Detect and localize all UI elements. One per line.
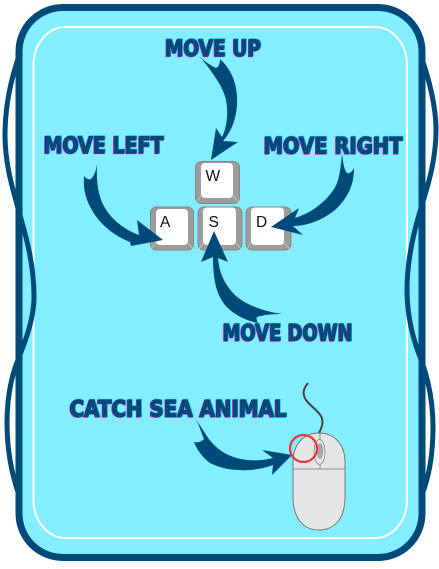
label: move left: MOVE LEFT [44, 133, 164, 158]
key: A [150, 207, 194, 250]
key: A: A [160, 214, 171, 231]
label: move left: MOVE LEFT [44, 134, 164, 159]
key: W [196, 162, 240, 204]
key: D: D [256, 214, 267, 231]
label: catch sea animal: CATCH SEA ANIMAL [70, 397, 287, 422]
arrow: move right to D [271, 153, 354, 235]
key: W: W [206, 168, 220, 185]
label: move up: MOVE UP [165, 37, 261, 62]
key: S [198, 207, 242, 250]
label: catch sea animal: CATCH SEA ANIMAL [69, 398, 286, 423]
label: move down: MOVE DOWN [223, 321, 353, 346]
icon: computer mouse [293, 383, 345, 530]
label: move left: MOVE LEFT [43, 135, 163, 160]
label: move down: MOVE DOWN [223, 322, 353, 346]
label: move right: MOVE RIGHT [264, 134, 403, 159]
label: move right: MOVE RIGHT [264, 134, 403, 160]
wavy strap: left [5, 56, 34, 495]
arrow: move up to W [198, 55, 238, 160]
panel: white inner outline [34, 27, 407, 538]
key: S: S [208, 214, 219, 231]
label: catch sea animal: CATCH SEA ANIMAL [70, 398, 287, 422]
wavy strap: right [407, 56, 436, 497]
arrow: move down to S [201, 231, 282, 323]
arrow: move left to A [84, 157, 163, 246]
label: move up: MOVE UP [166, 36, 262, 61]
label: move right: MOVE RIGHT [263, 135, 402, 160]
icon: red highlight circle on left button [290, 435, 317, 462]
label: move down: MOVE DOWN [222, 322, 352, 347]
label: move up: MOVE UP [164, 38, 260, 63]
key: D [246, 207, 291, 250]
arrow: catch sea animal to mouse button [194, 418, 292, 475]
